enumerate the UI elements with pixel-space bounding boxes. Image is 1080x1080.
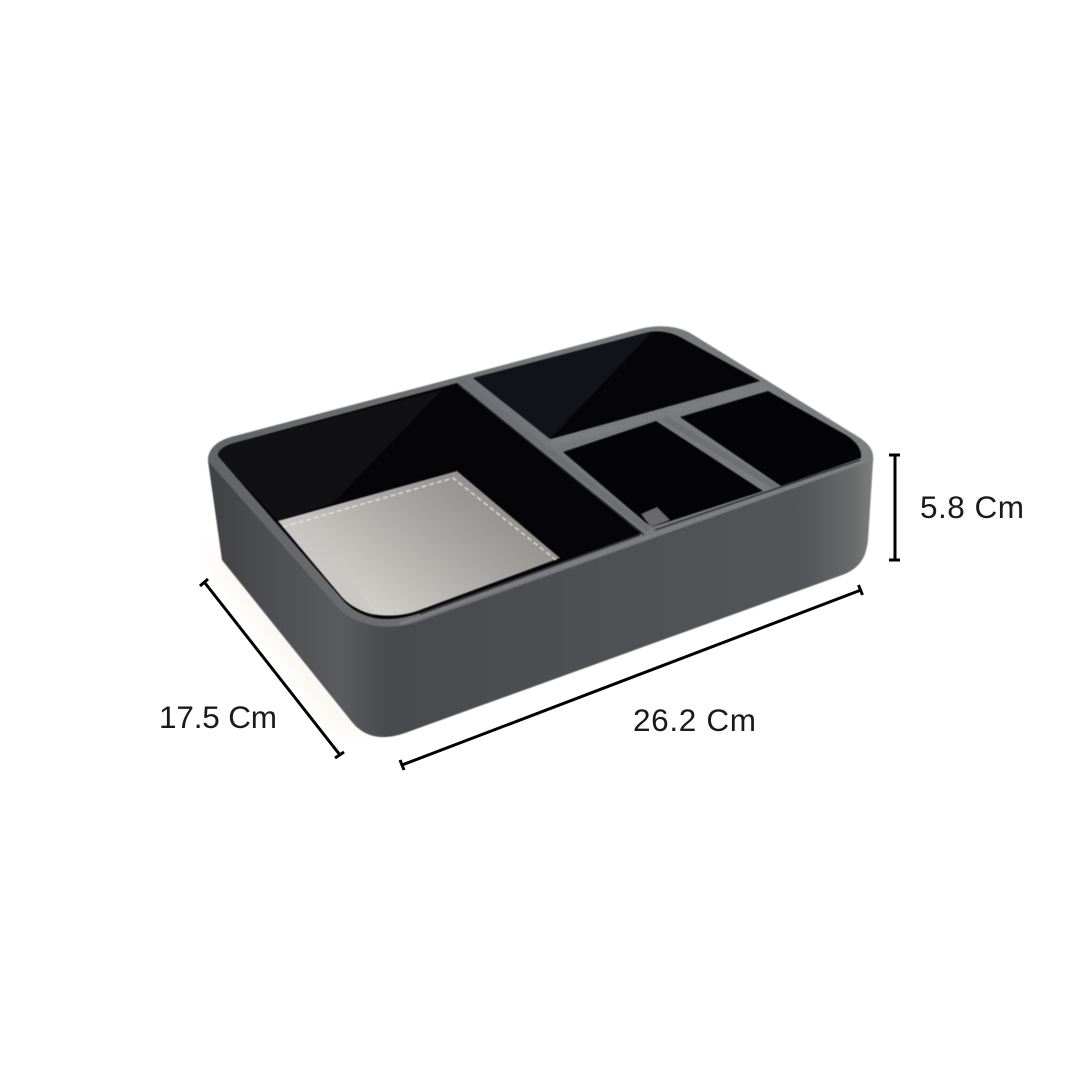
middle compartment [563, 421, 763, 527]
wall fabric highlight [218, 390, 442, 521]
front rim highlight [400, 458, 873, 624]
dimension: width 26.2 Cm [400, 585, 862, 770]
floor stitching [283, 478, 556, 560]
right compartment [680, 391, 861, 486]
floor lighter left strip [278, 513, 375, 615]
label: height: 5.8 Cm [920, 489, 1024, 525]
short divider [664, 418, 777, 488]
interior: left compartment walls [218, 383, 643, 619]
floor panel [278, 471, 560, 616]
soft shadow [205, 545, 360, 730]
upper right fabric highlight [473, 332, 652, 439]
label: width: 26.2 Cm [633, 702, 756, 738]
cross divider [551, 386, 768, 443]
rim [208, 326, 873, 627]
front rim groove [420, 460, 860, 614]
small floor glimpse [641, 507, 670, 527]
upper right compartment [473, 331, 760, 439]
dimension: height 5.8 Cm [889, 455, 900, 560]
dimension: depth 17.5 Cm [200, 579, 344, 758]
label: depth: 17.5 Cm [159, 699, 277, 735]
long divider [460, 380, 648, 530]
tray outer body [208, 326, 873, 737]
tray [208, 326, 873, 737]
